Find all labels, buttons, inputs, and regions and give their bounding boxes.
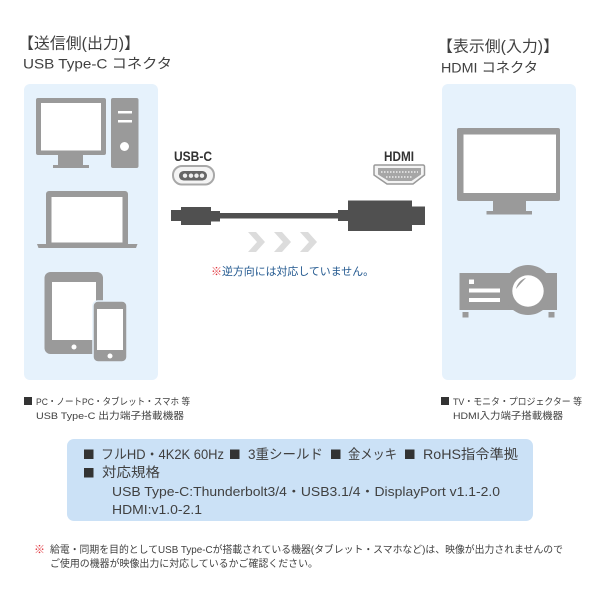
- icon: projector: [460, 265, 557, 318]
- spec: supported standards: [84, 465, 500, 517]
- label: USB-C: USB-C: [174, 148, 212, 164]
- icon: desktop monitor: [36, 98, 106, 168]
- spec bullets row one: フルHD・4K2K 60Hz: [101, 447, 224, 462]
- note: one-way only: 逆方向には対応していません。: [222, 264, 374, 278]
- heading: source side: USB Type-C コネクタ: [23, 56, 172, 72]
- panel: source devices: [24, 84, 158, 380]
- heading: display side: [437, 38, 559, 76]
- footnote: [34, 543, 563, 570]
- footnote: ご使用の機器が映像出力に対応しているかご確認ください。: [50, 557, 318, 570]
- illustration: cable: [171, 200, 425, 231]
- icon: USB-C port: [173, 166, 214, 184]
- caption: display devices: [441, 396, 582, 422]
- caption: source devices: USB Type-C 出力端子搭載機器: [36, 410, 185, 422]
- icon: desktop tower: [111, 98, 138, 168]
- icon: laptop: [37, 191, 138, 248]
- heading: source side: [18, 34, 172, 72]
- footnote: ※: [34, 544, 45, 556]
- spec bullets row one: 3重シールド: [248, 447, 323, 462]
- panel: specifications: [67, 439, 533, 521]
- spec bullets row one: 金メッキ: [348, 447, 397, 462]
- note: one-way only: ※: [211, 266, 222, 278]
- caption: source devices: [24, 396, 190, 422]
- heading: display side: HDMI コネクタ: [441, 60, 538, 76]
- spec: supported standards: HDMI:v1.0-2.1: [112, 502, 202, 517]
- spec: supported standards: 対応規格: [102, 465, 161, 480]
- panel: display devices: [442, 84, 576, 380]
- footnote: 給電・同期を目的としてUSB Type-Cが搭載されている機器(タブレット・スマホなど)は、映像が出力されませんので: [50, 543, 563, 556]
- caption: display devices: TV・モニタ・プロジェクター 等: [453, 396, 582, 408]
- heading: display side: 【表示側(入力)】: [437, 38, 559, 56]
- caption: display devices: HDMI入力端子搭載機器: [453, 410, 564, 422]
- spec bullets row one: RoHS指令準拠: [423, 447, 519, 462]
- icon: smartphone: [93, 301, 127, 362]
- heading: source side: 【送信側(出力)】: [18, 34, 140, 52]
- label: HDMI: HDMI: [384, 148, 414, 164]
- arrows: signal direction: [248, 232, 317, 252]
- spec: supported standards: USB Type-C:Thunderbolt3/4・USB3.1/4・DisplayPort v1.1-2.0: [112, 484, 500, 499]
- icon: tablet: [44, 272, 103, 354]
- icon: HDMI port: [374, 165, 424, 184]
- icon: TV monitor: [457, 128, 560, 214]
- spec bullets row one: [84, 447, 519, 462]
- caption: source devices: PC・ノートPC・タブレット・スマホ 等: [36, 396, 190, 408]
